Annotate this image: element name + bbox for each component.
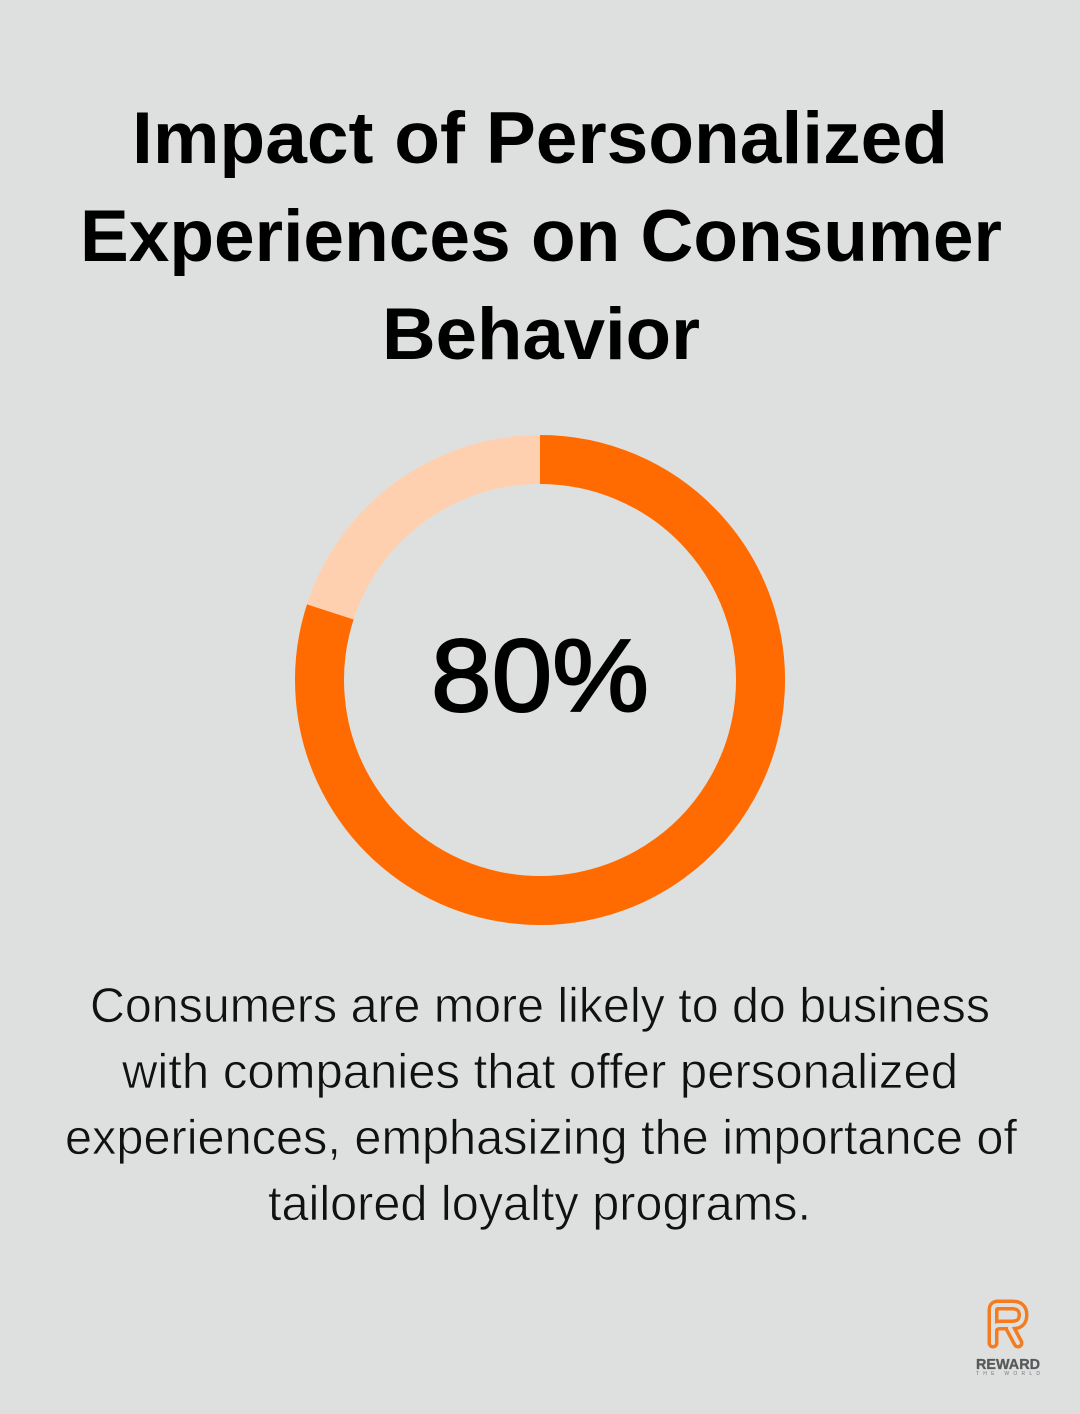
title: Behavior (382, 294, 700, 375)
logo: Reward the World (976, 1305, 1040, 1377)
description text: with companies that offer personalized (121, 1045, 958, 1099)
big number: 80% (431, 618, 649, 733)
description text: tailored loyalty programs. (268, 1177, 811, 1231)
description text: Consumers are more likely to do business (90, 979, 990, 1033)
description text (65, 979, 1017, 1231)
description text: experiences, emphasizing the importance of (65, 1111, 1017, 1165)
logo icon: R mark (993, 1305, 1023, 1343)
donut chart: 80% (320, 460, 761, 901)
title: Experiences on Consumer (80, 196, 1002, 277)
logo tagline: THE WORLD (976, 1371, 1040, 1377)
chart track: remaining 20% (320, 460, 760, 900)
logo wordmark: REWARD (976, 1357, 1040, 1373)
title (80, 98, 1002, 375)
title: Impact of Personalized (132, 98, 948, 179)
chart value arc: 80% (320, 460, 761, 901)
